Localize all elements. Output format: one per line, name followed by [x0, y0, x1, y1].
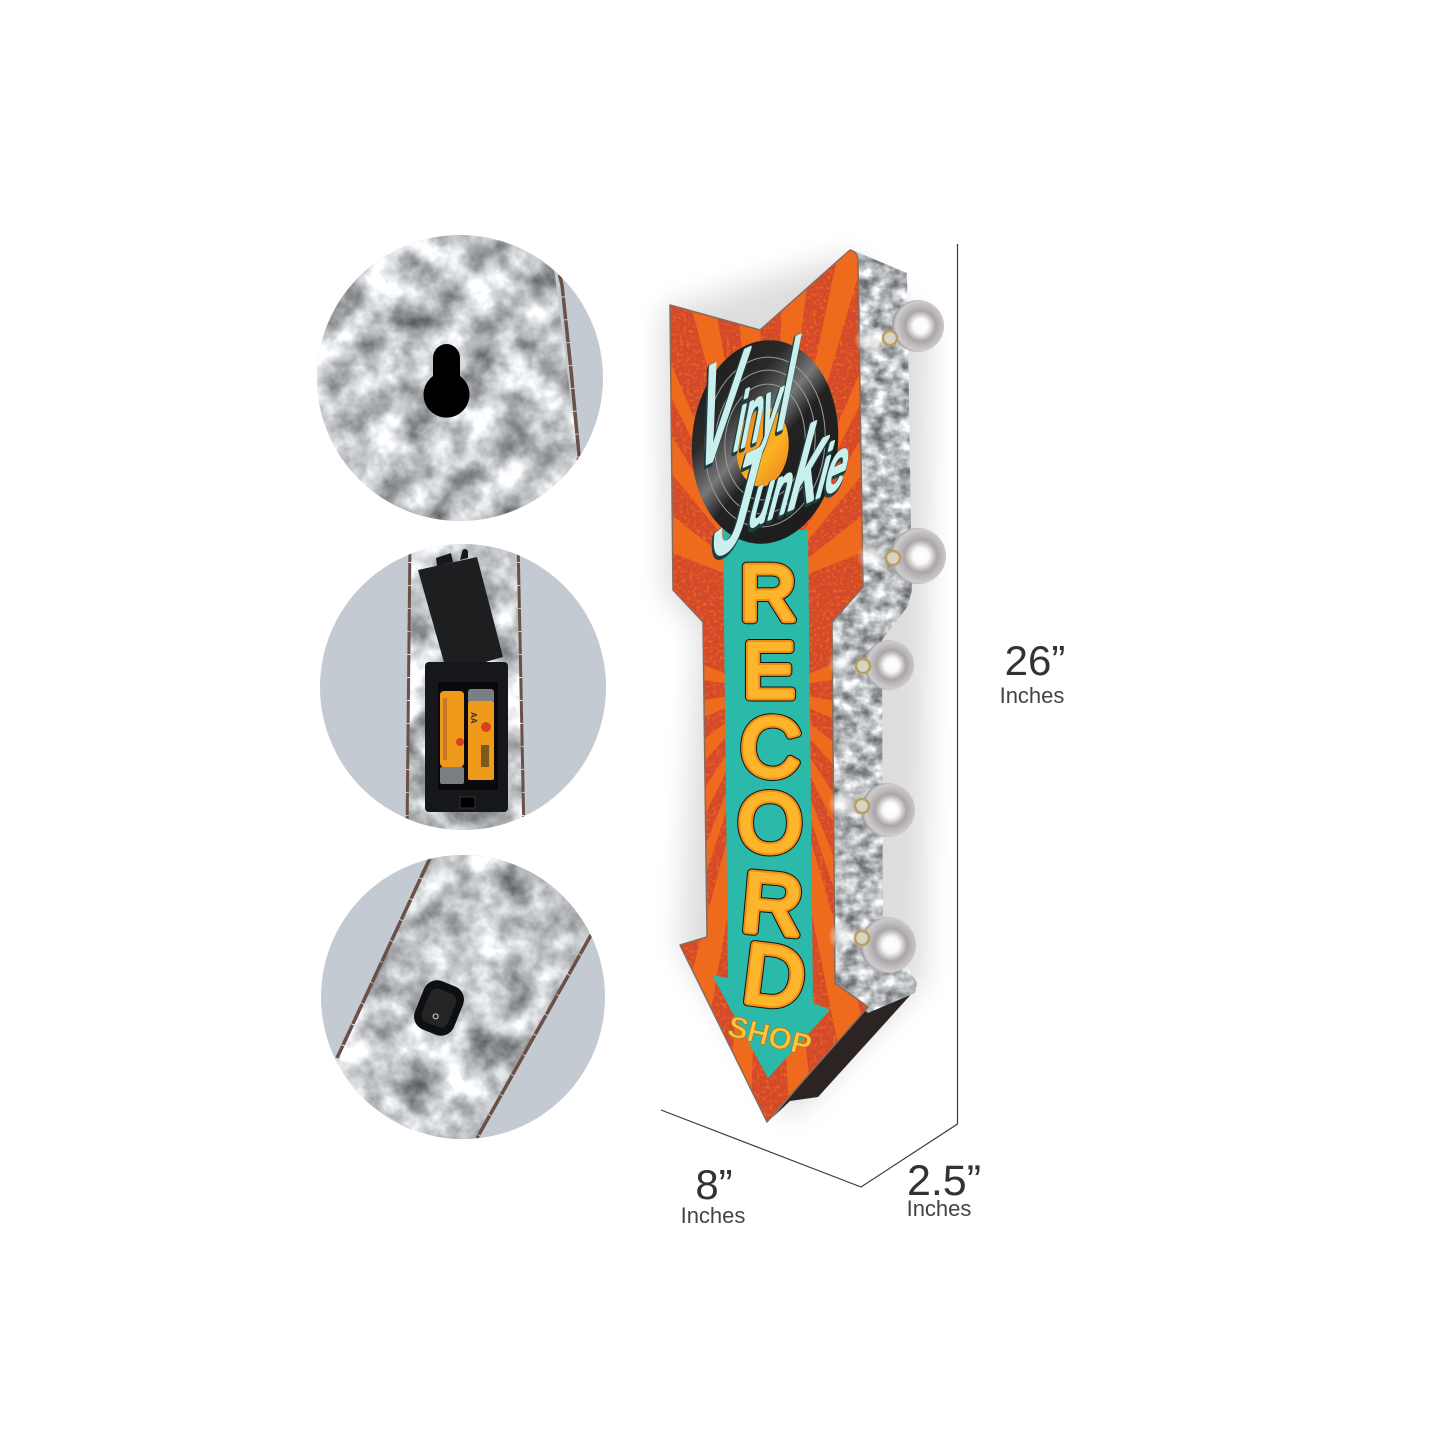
cover hinge tabs: [436, 549, 468, 566]
dimension label: depth: Inches: [907, 1196, 971, 1221]
bulbs: [828, 300, 946, 973]
record label: [733, 405, 792, 489]
bulb 4: [828, 783, 915, 837]
RECORD lettering highlight: C: [738, 699, 803, 795]
script title shadow: J: [705, 420, 767, 589]
RECORD lettering outline: C: [738, 699, 803, 795]
RECORD lettering outline: O: [738, 776, 802, 869]
panel: power switch circle: [321, 855, 605, 1139]
RECORD lettering outline: E: [743, 626, 795, 714]
sign front background: [670, 250, 867, 1120]
bulb 3: [828, 640, 914, 690]
sign front edge: [670, 250, 868, 1122]
script title: Vinyl: [688, 293, 806, 502]
lower sunburst rays: [681, 665, 861, 1096]
script title: J: [706, 418, 768, 587]
RECORD lettering body: C: [738, 699, 803, 795]
panel: arrow sign: [640, 235, 946, 1130]
holder latch: [460, 797, 475, 808]
bulb 2: [857, 528, 946, 584]
battery right: AA: [469, 712, 478, 724]
holder well: [438, 682, 498, 790]
panel: keyhole detail circle: [310, 230, 603, 530]
infographic canvas: [317, 235, 1064, 1223]
RECORD lettering highlight: E: [743, 626, 795, 714]
dimension lines: [661, 244, 958, 1187]
SHOP label: SHOP: [724, 1010, 815, 1063]
RECORD lettering highlight: R: [740, 549, 796, 637]
soft drop shadow: [662, 255, 930, 1120]
dimension label: width: 8”: [695, 1161, 733, 1208]
battery right: [468, 689, 494, 780]
dimension label: width: Inches: [681, 1203, 745, 1228]
battery cover flap: [418, 557, 503, 673]
RECORD lettering highlight: R: [738, 854, 807, 953]
galvanized metal back: [310, 230, 580, 530]
metal strip diagonal: [336, 855, 591, 1139]
metal strip: [407, 540, 524, 835]
RECORD lettering outline: D: [738, 926, 810, 1026]
script title shadow: [687, 295, 862, 589]
teal arrow shaft: [712, 530, 830, 1078]
RECORD lettering outline: R: [738, 854, 807, 953]
icon: rocker switch: [410, 976, 468, 1040]
RECORD lettering body: R: [738, 854, 807, 953]
battery holder: [425, 662, 508, 812]
dimension label: width: [681, 1161, 745, 1228]
script title: un: [745, 446, 799, 544]
upper sunburst rays: [672, 251, 862, 574]
vinyl record: [683, 334, 847, 550]
dimension label: height: [1000, 637, 1065, 708]
script title shadow: kie: [782, 398, 854, 537]
dimension label: depth: 2.5”: [907, 1157, 981, 1205]
RECORD lettering body: D: [738, 926, 810, 1026]
script title: kie: [783, 396, 855, 535]
RECORD lettering highlight: D: [738, 926, 810, 1026]
sign side galvanized metal: [830, 250, 917, 1013]
panel: battery compartment circle: [320, 540, 606, 835]
dimension label: height: Inches: [1000, 683, 1064, 708]
RECORD lettering highlight: O: [738, 776, 802, 869]
bulb 5: [828, 917, 916, 973]
bulb 1: [854, 300, 944, 354]
RECORD lettering body: O: [738, 776, 802, 869]
RECORD lettering body: R: [740, 549, 796, 637]
battery left: [440, 691, 464, 784]
RECORD lettering outline: R: [740, 549, 796, 637]
paint texture: [670, 264, 865, 1117]
RECORD lettering body: E: [743, 626, 795, 714]
icon: keyhole slot: [423, 344, 470, 418]
script title: [688, 293, 863, 587]
script title shadow: Vinyl: [687, 295, 805, 504]
sign side dark underside: [772, 990, 915, 1118]
dimension label: height: 26”: [1005, 637, 1065, 684]
script title shadow: un: [744, 448, 798, 546]
